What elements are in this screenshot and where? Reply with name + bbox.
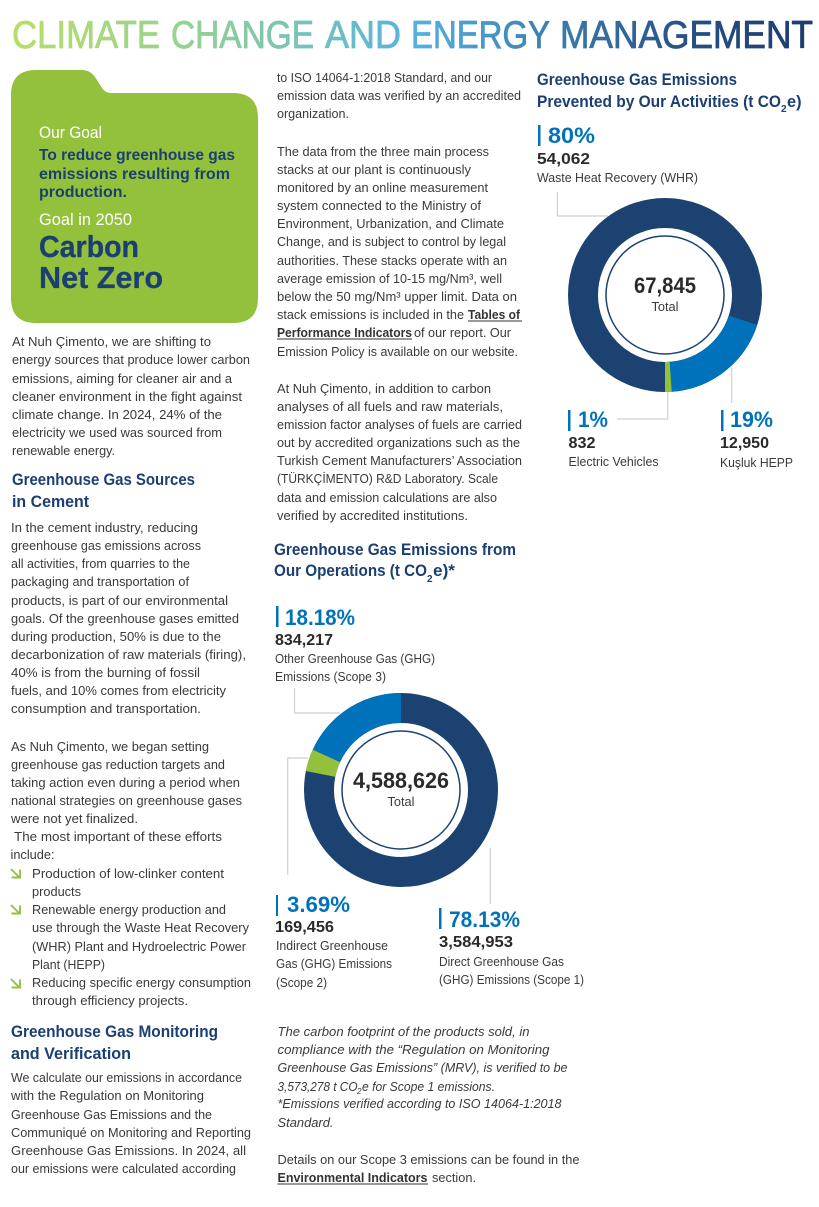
- heading: greenhouse gas sources: Greenhouse Gas Sources: [12, 471, 195, 489]
- text block: monitoring: with the Regulation on Monitoring: [10, 1088, 204, 1103]
- text block: monitoring: Greenhouse Gas Emissions and the: [11, 1107, 212, 1122]
- title: ENERGY: [411, 14, 550, 57]
- heading: emissions prevented: Greenhouse Gas Emissions: [537, 71, 737, 89]
- text block: scope 3 details: section.: [432, 1170, 476, 1185]
- text block: monitoring: Communiqué on Monitoring and Reporting: [11, 1125, 251, 1140]
- callout: scope 3: 18.18%: [285, 605, 355, 630]
- text block: carbon analyses: verified by accredited institutions.: [277, 508, 468, 523]
- chart: operations emissions donut: 4,588,626: [353, 768, 449, 793]
- bullet list: efforts: Production of low-clinker content: [32, 866, 224, 881]
- callout: scope 2: (Scope 2): [276, 975, 327, 990]
- text block: monitoring: our emissions were calculated according: [11, 1161, 236, 1176]
- chart: operations emissions donut: Total: [388, 794, 415, 809]
- panel: goal folder: Our Goal: [39, 124, 102, 142]
- text block: intro: renewable energy.: [12, 443, 115, 458]
- heading: emissions prevented: [537, 71, 802, 115]
- callout: electric vehicles: Electric Vehicles: [568, 454, 659, 469]
- text block: carbon footprint note: e for Scope 1 emissions.: [362, 1079, 495, 1094]
- text block: reduction targets: were not yet finalized.: [10, 811, 138, 826]
- callout: waste heat recovery: 80%: [548, 123, 595, 148]
- heading: greenhouse gas sources: [12, 471, 195, 511]
- panel: goal folder: Net Zero: [39, 261, 163, 295]
- title: [12, 14, 813, 57]
- text block: sources in cement: In the cement industry, reducing: [11, 520, 198, 535]
- callout: Kuşluk HEPP: Kuşluk HEPP: [720, 455, 793, 470]
- text block: carbon footprint note: [278, 1024, 568, 1130]
- text block: scope 3 details: Details on our Scope 3 emissions can be found in the: [278, 1152, 580, 1167]
- text block: sources in cement: [11, 520, 246, 716]
- title: CHANGE: [171, 14, 314, 57]
- bullet list: efforts: Reducing specific energy consumption: [32, 975, 251, 990]
- text block: process stacks: Emission Policy is available on our website.: [277, 344, 518, 359]
- heading: monitoring and verification: Greenhouse Gas Monitoring: [11, 1023, 218, 1041]
- heading: greenhouse gas sources: in Cement: [12, 493, 89, 511]
- panel: goal folder: production.: [39, 184, 127, 201]
- text block: process stacks: of our report. Our: [414, 325, 512, 340]
- title: CLIMATE: [12, 14, 160, 57]
- segment: scope 3: [326, 708, 401, 756]
- text block: carbon footprint note: 3,573,278 t CO: [278, 1079, 358, 1094]
- bullet list: efforts: use through the Waste Heat Recovery: [32, 920, 249, 935]
- text block: carbon analyses: out by accredited organizations such as the: [277, 435, 520, 450]
- callout: Kuşluk HEPP: 12,950: [720, 435, 769, 452]
- bullet list: efforts: products: [32, 884, 81, 899]
- heading: emissions prevented: e): [787, 93, 802, 111]
- text block: reduction targets: As Nuh Çimento, we began setting: [11, 739, 209, 754]
- text block: process stacks: Tables of: [468, 307, 521, 322]
- callout: scope 2: [275, 758, 392, 990]
- chart: operations emissions donut: [319, 708, 483, 872]
- chart: prevented emissions donut: [583, 213, 747, 377]
- callout: scope 1: [439, 848, 584, 987]
- text block: sources in cement: packaging and transportation of: [11, 574, 189, 589]
- text block: reduction targets: include:: [10, 847, 54, 862]
- heading: monitoring and verification: [11, 1023, 218, 1063]
- text block: process stacks: Environment, Urbanization, and Climate: [277, 216, 504, 231]
- text block: sources in cement: decarbonization of raw materials (firing),: [11, 647, 246, 662]
- text block: sources in cement: 40% is from the burning of fossil: [11, 665, 200, 680]
- callout: scope 3: 834,217: [275, 632, 333, 649]
- heading: emissions prevented: 2: [781, 104, 787, 115]
- panel: goal folder: Goal in 2050: [39, 211, 132, 229]
- text block: carbon footprint note: 2: [356, 1087, 362, 1096]
- callout: Kuşluk HEPP: 19%: [730, 407, 773, 432]
- text block: carbon footprint note: Greenhouse Gas Emissions” (MRV), is verified to be: [278, 1060, 568, 1075]
- callout: scope 3: [275, 605, 435, 713]
- heading: emissions prevented: Prevented by Our Activities (t CO: [537, 93, 781, 111]
- text block: ISO standard continued: [277, 70, 521, 121]
- callout: scope 3: Other Greenhouse Gas (GHG): [275, 651, 435, 666]
- text block: process stacks: monitored by an online measurement: [277, 180, 488, 195]
- callout: waste heat recovery: 54,062: [537, 151, 590, 168]
- bullet list: efforts: (WHR) Plant and Hydroelectric Power: [32, 939, 247, 954]
- text block: process stacks: Performance Indicators: [277, 325, 412, 340]
- icon: arrow bullet 1: [11, 869, 20, 878]
- text block: reduction targets: taking action even during a period when: [11, 775, 240, 790]
- callout: scope 2: 3.69%: [287, 892, 350, 917]
- icon: arrow bullet 3: [11, 979, 20, 988]
- heading: monitoring and verification: and Verification: [11, 1045, 131, 1063]
- panel: goal folder: [11, 70, 258, 323]
- segment: scope 2: [321, 756, 326, 774]
- segment: Kuşluk HEPP: [671, 320, 743, 377]
- text block: carbon analyses: emission factor analyses of fuels are carried: [277, 417, 522, 432]
- icon: arrow bullet 2: [11, 905, 20, 914]
- text block: intro: energy sources that produce lower carbon: [12, 352, 250, 367]
- callout: waste heat recovery: [537, 123, 698, 216]
- text block: process stacks: average emission of 10-15 mg/Nm³, well: [277, 271, 502, 286]
- segment: electric vehicles: [665, 362, 671, 392]
- text block: sources in cement: products, is part of our environmental: [11, 593, 228, 608]
- callout: electric vehicles: [568, 392, 668, 469]
- callout: scope 1: (GHG) Emissions (Scope 1): [439, 972, 584, 987]
- text block: sources in cement: greenhouse gas emissions across: [11, 538, 201, 553]
- text block: sources in cement: fuels, and 10% comes from electricity: [11, 683, 226, 698]
- text block: carbon analyses: analyses of all fuels and raw materials,: [277, 399, 503, 414]
- callout: Kuşluk HEPP: [720, 368, 793, 470]
- heading: emissions from operations: Greenhouse Gas Emissions from: [274, 541, 516, 559]
- text block: carbon analyses: Turkish Cement Manufacturers’ Association: [277, 453, 522, 468]
- text block: carbon footprint note: *Emissions verified according to ISO 14064-1:2018: [278, 1096, 562, 1111]
- callout: scope 2: Gas (GHG) Emissions: [276, 956, 392, 971]
- text block: intro: [12, 334, 250, 458]
- callout: scope 2: Indirect Greenhouse: [276, 938, 388, 953]
- text block: ISO standard continued: to ISO 14064-1:2018 Standard, and our: [277, 70, 493, 85]
- chart: prevented emissions donut: Total: [652, 299, 679, 314]
- callout: electric vehicles: 832: [568, 435, 596, 452]
- text block: carbon analyses: [277, 381, 522, 523]
- text block: monitoring: Greenhouse Gas Emissions. In 2024, all: [11, 1143, 246, 1158]
- text block: scope 3 details: [278, 1152, 580, 1185]
- text block: process stacks: Change, and is subject to control by legal: [277, 234, 506, 249]
- text block: carbon analyses: data and emission calculations are also: [277, 490, 497, 505]
- text block: sources in cement: goals. Of the greenhouse gases emitted: [11, 611, 239, 626]
- text block: process stacks: stacks at our plant is continuously: [277, 162, 471, 177]
- heading: emissions from operations: [274, 541, 516, 585]
- callout: waste heat recovery: Waste Heat Recovery (WHR): [537, 170, 698, 185]
- text block: process stacks: below the 50 mg/Nm³ upper limit. Data on: [277, 289, 517, 304]
- text block: process stacks: The data from the three main process: [277, 144, 489, 159]
- text block: process stacks: authorities. These stacks operate with an: [277, 253, 507, 268]
- panel: goal folder: Carbon: [39, 230, 139, 264]
- callout: electric vehicles: 1%: [578, 407, 608, 432]
- text block: ISO standard continued: emission data was verified by an accredited: [277, 88, 521, 103]
- panel: goal folder: emissions resulting from: [39, 166, 230, 183]
- heading: emissions from operations: Our Operations (t CO: [274, 562, 427, 580]
- text block: sources in cement: consumption and transportation.: [11, 701, 201, 716]
- text block: sources in cement: during production, 50% is due to the: [11, 629, 221, 644]
- chart: prevented emissions donut: 67,845: [634, 273, 696, 298]
- callout: scope 2: 169,456: [275, 919, 334, 936]
- text block: carbon footprint note: Standard.: [278, 1115, 334, 1130]
- text block: process stacks: stack emissions is included in the: [277, 307, 464, 322]
- text block: process stacks: system connected to the Ministry of: [277, 198, 481, 213]
- callout: scope 3: Emissions (Scope 3): [275, 669, 386, 684]
- title: AND: [325, 14, 401, 57]
- heading: emissions from operations: 2: [427, 574, 433, 585]
- heading: emissions from operations: e)*: [433, 562, 456, 580]
- bullet list: efforts: Renewable energy production and: [32, 902, 226, 917]
- callout: scope 1: 78.13%: [449, 907, 520, 932]
- text block: intro: cleaner environment in the fight against: [12, 389, 242, 404]
- text block: carbon analyses: (TÜRKÇİMENTO) R&D Laboratory. Scale: [277, 471, 498, 486]
- text block: carbon analyses: At Nuh Çimento, in addition to carbon: [277, 381, 491, 396]
- bullet list: efforts: [11, 866, 251, 1008]
- bullet list: efforts: through efficiency projects.: [32, 993, 188, 1008]
- text block: reduction targets: greenhouse gas reduction targets and: [11, 757, 225, 772]
- text block: ISO standard continued: organization.: [277, 106, 349, 121]
- text block: scope 3 details: Environmental Indicators: [278, 1170, 428, 1185]
- text block: intro: emissions, aiming for cleaner air and a: [12, 371, 233, 386]
- text block: reduction targets: The most important of these efforts: [14, 829, 223, 844]
- text block: carbon footprint note: The carbon footprint of the products sold, in: [278, 1024, 530, 1039]
- text block: reduction targets: [10, 739, 242, 862]
- text block: carbon footprint note: compliance with the “Regulation on Monitoring: [278, 1042, 550, 1057]
- text block: intro: At Nuh Çimento, we are shifting to: [12, 334, 211, 349]
- text block: intro: electricity we used was sourced from: [12, 425, 222, 440]
- text block: intro: climate change. In 2024, 24% of the: [12, 407, 222, 422]
- text block: reduction targets: national strategies on greenhouse gases: [11, 793, 242, 808]
- callout: scope 1: 3,584,953: [439, 934, 513, 951]
- text block: monitoring: [10, 1070, 251, 1176]
- text block: process stacks: [277, 144, 522, 359]
- text block: sources in cement: all activities, from quarries to the: [11, 556, 190, 571]
- bullet list: efforts: Plant (HEPP): [32, 957, 105, 972]
- callout: scope 1: Direct Greenhouse Gas: [439, 954, 564, 969]
- text block: monitoring: We calculate our emissions in accordance: [11, 1070, 242, 1085]
- panel: goal folder: To reduce greenhouse gas: [39, 147, 235, 164]
